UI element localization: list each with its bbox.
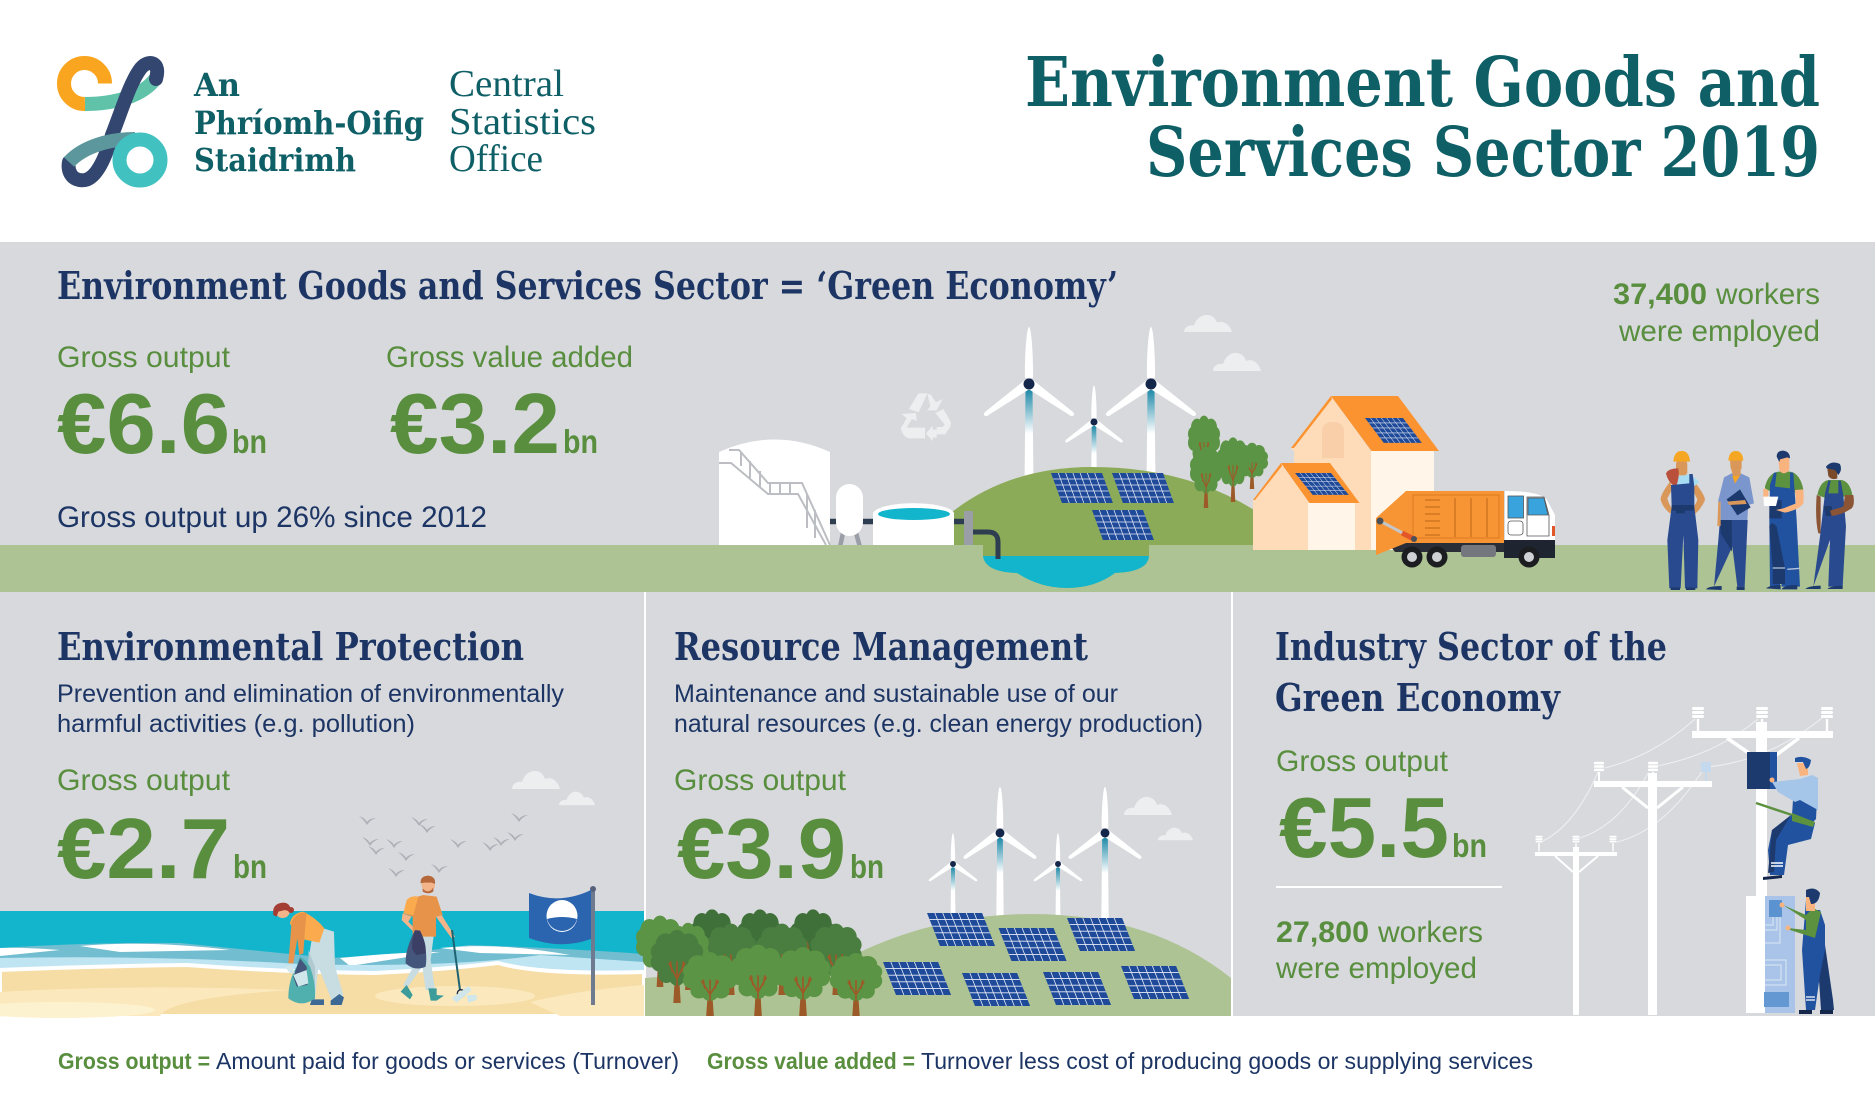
illustration: wind, solar and forest (636, 787, 1231, 1016)
dividers between panels (644, 592, 1233, 1016)
illustration: beach clean-up (0, 771, 644, 1018)
hill (952, 467, 1262, 560)
logo English name: Central (449, 63, 564, 105)
wind turbines (984, 327, 1196, 494)
worker 3 (1763, 451, 1804, 589)
wires (1543, 718, 1822, 842)
gross output stat (1276, 745, 1487, 876)
workers stat: 27,800 (1276, 916, 1369, 949)
small house (1253, 463, 1360, 550)
small pressure vessel (836, 484, 863, 547)
storage tank with stairs (719, 440, 830, 545)
clouds (1184, 315, 1261, 371)
round water tank (873, 503, 954, 545)
gross output stat: Gross output (57, 341, 231, 374)
logo Irish name: Phríomh-Oifig (194, 104, 424, 142)
clouds (1124, 797, 1193, 840)
gross output stat (57, 764, 267, 897)
pole medium (1594, 762, 1712, 1015)
gross output stat: Gross output (1276, 745, 1449, 778)
workers stat: were employed (1618, 315, 1820, 348)
description: Maintenance and sustainable use of our (674, 680, 1118, 708)
description: harmful activities (e.g. pollution) (57, 710, 415, 738)
workers stat (1613, 278, 1820, 348)
heading (1275, 624, 1667, 720)
logo Irish name: Staidrimh (194, 141, 356, 179)
gross value added stat: bn (563, 423, 598, 460)
gross output stat (674, 764, 884, 897)
gross output stat: bn (232, 423, 267, 460)
wind turbines (929, 787, 1142, 923)
workers stat: workers (1377, 916, 1483, 949)
gross output stat: bn (233, 848, 267, 885)
title (1025, 43, 1820, 193)
pole large (1692, 707, 1833, 896)
workers stat: workers (1715, 278, 1820, 311)
growth note: Gross output up 26% since 2012 (57, 501, 487, 534)
gross output stat (57, 341, 267, 472)
logo English name: Office (449, 138, 543, 180)
solar panels (883, 913, 1189, 1006)
description (674, 680, 1203, 738)
logo: Central Statistics Office (64, 63, 596, 180)
gross output stat: €3.9 (677, 802, 846, 897)
logo English name: Statistics (449, 101, 596, 143)
logo Irish name: An (193, 66, 240, 104)
person bending with bag (273, 903, 344, 1005)
description: natural resources (e.g. clean energy production) (674, 710, 1203, 738)
pipes (830, 519, 965, 524)
workers (1661, 451, 1854, 590)
junction box on pole (1747, 752, 1777, 789)
heading: Environmental Protection (57, 624, 524, 669)
pond (983, 556, 1149, 588)
gross value added stat: €3.2 (390, 377, 560, 472)
gross output stat: €6.6 (57, 377, 230, 472)
workers stat: 37,400 (1613, 278, 1707, 311)
footer definitions: Amount paid for goods or services (Turnover) (216, 1048, 679, 1074)
heading: Green Economy (1275, 675, 1561, 720)
gross output stat: €2.7 (57, 802, 230, 897)
trees (1188, 416, 1268, 508)
climbing technician (1756, 757, 1818, 880)
description: Prevention and elimination of environmentally (57, 680, 564, 708)
person with litter picker (401, 876, 477, 1003)
panel: green economy summary (57, 263, 1820, 534)
clouds (512, 771, 595, 805)
outflow pipe (964, 511, 998, 559)
workers stat: were employed (1275, 952, 1477, 985)
hill (645, 914, 1231, 1016)
heading: Industry Sector of the (1275, 624, 1667, 669)
forest (636, 909, 882, 1016)
panel: environmental protection (57, 624, 564, 897)
gross value added stat (386, 341, 633, 472)
gross output stat: bn (1452, 827, 1487, 864)
gross output stat: €5.5 (1279, 781, 1449, 876)
panel: resource management (674, 624, 1203, 897)
logo mark (64, 63, 160, 180)
ground band (0, 545, 1875, 592)
pole small (1535, 836, 1617, 1015)
logo English name (449, 63, 596, 180)
blue flag (529, 886, 596, 1005)
worker 2 (1706, 451, 1754, 590)
icon: recycling symbol (901, 393, 951, 441)
illustration: green economy landscape (0, 315, 1875, 592)
footer definitions (58, 1048, 1533, 1074)
panel: industry sector (1275, 624, 1667, 985)
technician at cabinet (1780, 889, 1834, 1014)
solar panels on hill (1051, 473, 1174, 540)
worker 1 (1661, 451, 1705, 590)
gross output stat: bn (850, 848, 884, 885)
description (57, 680, 564, 738)
gross output stat: Gross output (674, 764, 847, 797)
outflow pipe end (996, 552, 1000, 559)
footer definitions: Turnover less cost of producing goods or supplying services (921, 1048, 1533, 1074)
worker 4 (1805, 462, 1854, 589)
large house (1291, 396, 1439, 550)
panel background: grey (0, 242, 1875, 1016)
logo Irish name (193, 66, 424, 179)
heading: Environment Goods and Services Sector = ‘Green Economy’ (57, 263, 1118, 308)
recycling truck (1376, 491, 1555, 568)
sea and sand (0, 911, 644, 1018)
footer definitions: Gross output = (58, 1048, 210, 1074)
footer definitions: Gross value added = (707, 1048, 915, 1074)
workers stat (1275, 916, 1483, 985)
birds (359, 813, 528, 877)
gross output stat: Gross output (57, 764, 231, 797)
heading: Resource Management (674, 624, 1088, 669)
gross value added stat: Gross value added (386, 341, 633, 374)
illustration: electricity poles and technicians (1535, 707, 1834, 1015)
electrical cabinet (1746, 896, 1795, 1013)
